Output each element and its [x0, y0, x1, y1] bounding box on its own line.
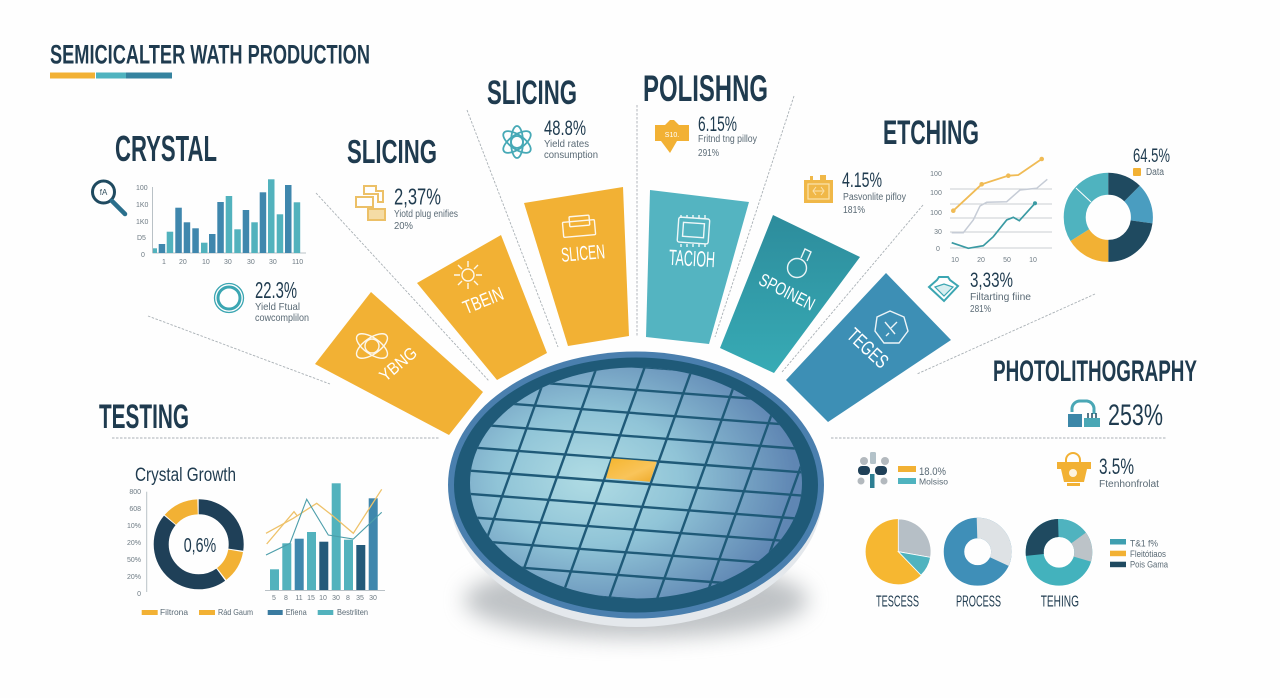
bar chart: crystal: 30	[224, 259, 232, 266]
bar chart: crystal: 20	[179, 259, 187, 266]
icon: sun burst	[454, 261, 482, 289]
stat: 4.15%: Pasvonlite pifloy	[843, 192, 906, 203]
legend: testing: Efiena	[286, 607, 307, 617]
legend: pies	[1110, 538, 1168, 570]
segment: tbein: TBEIN	[460, 284, 507, 319]
fan segments	[315, 187, 951, 435]
legend: testing: Rád Gaum	[218, 607, 253, 617]
subheading: crystal growth: Crystal Growth	[135, 465, 236, 486]
heading: etching: ETCHING	[883, 114, 979, 152]
heading: slicing: SLICING	[347, 133, 437, 170]
bar chart: crystal: 30	[247, 259, 255, 266]
segment: tacioh	[646, 190, 749, 344]
icon: ring flask	[788, 249, 811, 278]
heading: crystal: CRYSTAL	[115, 128, 217, 169]
icon: battery	[804, 175, 833, 203]
icon: chip	[677, 215, 710, 247]
line chart: 100	[930, 190, 942, 197]
wafer grid	[470, 368, 802, 598]
segment: teges: TEGES	[842, 324, 892, 373]
heading: slicing center: SLICING	[487, 74, 577, 112]
combo chart: testing: 5	[272, 595, 276, 602]
donut chart: testing: 608	[129, 506, 141, 513]
combo chart: testing: 30	[332, 595, 340, 602]
connector lines	[112, 96, 1167, 438]
donut chart: testing: 10%	[127, 523, 141, 530]
line chart: 100	[930, 210, 942, 217]
segment: slicen	[524, 187, 629, 346]
legend: 18.0%: 18.0%	[919, 466, 946, 478]
donut chart: testing: 0,6%	[184, 535, 216, 557]
stat: 3,33%: 3,33%	[970, 269, 1013, 292]
stat: 3,33%: 281%	[970, 303, 991, 315]
stat: 4.15%: 181%	[843, 204, 865, 216]
stat: 6.15%: 6.15%	[698, 113, 737, 136]
bar chart: crystal: 10	[202, 259, 210, 266]
stat: 3.5%	[1099, 454, 1159, 490]
stat: 253%: 253%	[1108, 399, 1163, 432]
combo chart: testing	[265, 483, 385, 602]
legend: testing: Filtrona	[160, 607, 188, 617]
line chart: 100	[930, 171, 942, 178]
legend: pies: Pois Gama	[1130, 560, 1168, 570]
icon: shield: S10.	[665, 132, 679, 139]
icon: atom yellow	[353, 329, 391, 363]
title: SEMICICALTER WATH PRODUCTION	[50, 40, 370, 70]
stat: 6.15%	[698, 113, 757, 159]
wafer shadow	[464, 562, 808, 638]
stat: 48.8%: Yield rates	[544, 138, 589, 150]
segment: slicen: SLICEN	[560, 241, 606, 267]
icon: stacked squares	[356, 186, 385, 220]
stat: 2,37%: 2,37%	[394, 184, 441, 210]
donut chart: tehing	[1035, 528, 1083, 610]
stat: 22.3%: Yield Ftual	[255, 301, 300, 313]
panel: polishing	[643, 68, 768, 159]
bar chart: crystal: 1K0	[136, 219, 149, 226]
icon: magnifier: fA	[100, 188, 108, 197]
segment: spoinen: SPOINEN	[756, 269, 818, 315]
line chart	[930, 157, 1052, 264]
pie chart: tescess	[866, 519, 931, 610]
icon: circuit cluster	[858, 452, 889, 488]
stat: 2,37%: Yiotd plug enifies	[394, 208, 458, 220]
segment: yong	[315, 292, 483, 435]
center die	[606, 458, 657, 482]
icon: yellow bag	[1057, 453, 1091, 486]
combo chart: testing: 15	[307, 595, 315, 602]
icon: magnifier	[92, 181, 125, 214]
bar chart: crystal: 1K0	[136, 202, 149, 209]
bar chart: crystal: 0	[141, 252, 145, 259]
combo chart: testing: 11	[295, 595, 303, 602]
icon: lock	[1068, 401, 1100, 427]
heading: testing: TESTING	[99, 398, 189, 436]
line chart: 10	[951, 257, 959, 264]
donut chart: process	[954, 528, 1001, 610]
wafer	[448, 352, 824, 650]
panel: photolithography	[858, 355, 1197, 610]
donut chart: tehing: TEHING	[1041, 594, 1079, 610]
stat: 6.15%: Fritnd tng pilloy	[698, 134, 757, 145]
donut chart: right: 64.5%	[1133, 146, 1170, 167]
bar chart: crystal: D5	[137, 235, 146, 242]
legend: 18.0%	[898, 466, 948, 486]
stat: 3,33%: Filtarting fiine	[970, 292, 1031, 303]
segment: tacioh: TACIOH	[668, 245, 716, 272]
stat: 2,37%	[394, 184, 458, 232]
donut chart: right	[1075, 146, 1170, 251]
stat: 48.8%: 48.8%	[544, 117, 586, 140]
stat: 3.5%: 3.5%	[1099, 454, 1134, 479]
combo chart: testing: 10	[319, 595, 327, 602]
donut chart: testing: 0	[137, 591, 141, 598]
donut chart: right: Data	[1146, 167, 1164, 178]
segment: tbein	[417, 235, 547, 380]
panel: crystal	[92, 128, 309, 324]
stat: 6.15%: 291%	[698, 147, 719, 159]
line chart: 30	[934, 229, 942, 236]
panel: slicing center	[487, 74, 598, 161]
donut chart: testing: 50%	[127, 557, 141, 564]
stat: 3,33%	[970, 269, 1031, 315]
bar chart: crystal: 1	[162, 259, 166, 266]
icon: ring	[214, 284, 244, 312]
stat: 4.15%: 4.15%	[842, 169, 882, 192]
stat: 22.3%: cowcomplilon	[255, 312, 309, 324]
legend: pies: Fleitótiaos	[1130, 549, 1166, 559]
legend: pies: T&1 f%	[1130, 538, 1158, 548]
line chart: 0	[936, 246, 940, 253]
donut chart: testing: 800	[129, 489, 141, 496]
bar chart: crystal	[136, 179, 306, 266]
stat: 22.3%	[255, 277, 309, 324]
bar chart: crystal: 110	[292, 259, 303, 266]
legend: testing: Bestrliten	[337, 607, 368, 617]
combo chart: testing: 8	[346, 595, 350, 602]
stat: 3.5%: Ftenhonfrolat	[1099, 479, 1159, 490]
icon: atom	[500, 126, 534, 158]
donut chart: testing: 20%	[127, 540, 141, 547]
combo chart: testing: 35	[356, 595, 364, 602]
line chart: 20	[977, 257, 985, 264]
panel: testing	[99, 398, 385, 617]
bar chart: crystal: 100	[136, 185, 148, 192]
bar chart: crystal: 30	[269, 259, 277, 266]
icon: layered chip	[562, 215, 596, 237]
line chart: 50	[1003, 257, 1011, 264]
stat: 22.3%: 22.3%	[255, 277, 297, 303]
combo chart: testing: 30	[369, 595, 377, 602]
heading: polishng: POLISHNG	[643, 68, 768, 109]
panel: etching	[804, 114, 1170, 315]
pie chart: tescess: TESCESS	[876, 594, 919, 610]
stat: 4.15%	[842, 169, 906, 216]
segment: yong: YBNG	[376, 343, 421, 385]
donut chart: process: PROCESS	[956, 594, 1001, 610]
legend: testing	[142, 607, 368, 617]
icon: hexagon molecule	[875, 311, 908, 343]
segment: teges	[786, 273, 951, 422]
stat: 2,37%: 20%	[394, 220, 413, 232]
donut chart: testing	[127, 489, 236, 598]
icon: gem	[929, 277, 958, 301]
donut chart: testing: 20%	[127, 574, 141, 581]
title	[50, 40, 370, 78]
stat: 48.8%: consumption	[544, 149, 598, 161]
stat: 48.8%	[544, 117, 598, 161]
combo chart: testing: 8	[284, 595, 288, 602]
segment: spoinen	[720, 215, 860, 373]
line chart: 10	[1029, 257, 1037, 264]
panel: slicing left	[347, 133, 458, 232]
legend: 18.0%: Molsiso	[919, 476, 948, 486]
